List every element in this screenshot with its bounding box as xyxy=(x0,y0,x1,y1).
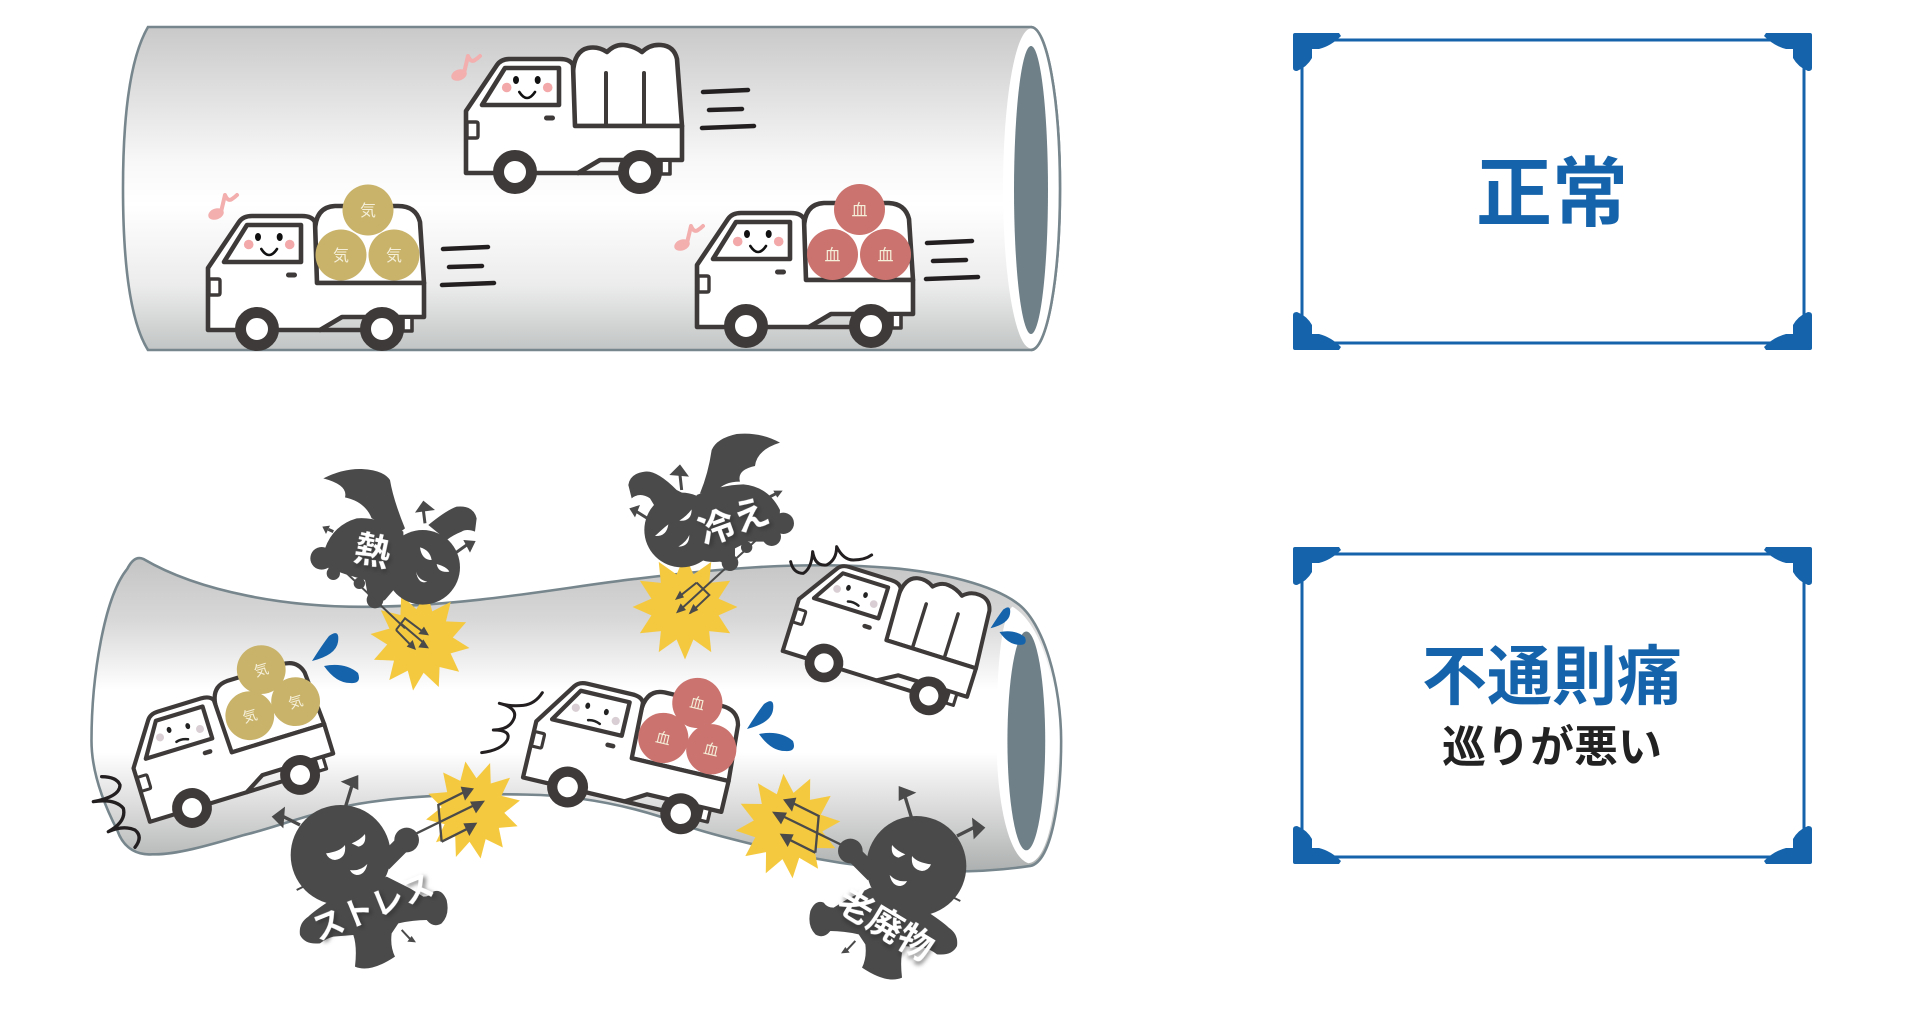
blood truck, struggling: 血 xyxy=(688,694,706,714)
qi truck, normal: 気 xyxy=(386,247,402,265)
devil: cold xyxy=(628,434,794,614)
healthy vessel tube xyxy=(123,27,1060,350)
blood truck, normal: 血 xyxy=(877,246,894,264)
blood truck, normal: 血 xyxy=(851,202,868,220)
blood truck, struggling: 血 xyxy=(702,740,720,760)
blood truck, struggling xyxy=(520,643,751,838)
empty covered truck (top) xyxy=(450,45,754,189)
blood truck, normal xyxy=(673,184,978,342)
qi truck, normal: 気 xyxy=(360,202,376,220)
devil: stress xyxy=(272,775,485,969)
panel: irregular flow: 巡りが悪い xyxy=(1442,723,1662,772)
devil: cold: 冷え xyxy=(693,490,775,553)
narrowed vessel tube xyxy=(91,558,1061,871)
devil: heat: 熱 xyxy=(351,527,394,575)
qi truck, struggling: 気 xyxy=(241,706,259,727)
qi truck, struggling: 気 xyxy=(286,692,305,713)
effort squiggle: rear of qi truck xyxy=(93,777,139,847)
qi truck, struggling xyxy=(110,632,344,835)
devil: heat xyxy=(310,469,477,650)
blood truck, struggling: 血 xyxy=(654,729,672,749)
panel: irregular flow xyxy=(1293,547,1812,864)
blood truck, normal: 血 xyxy=(824,246,841,264)
heat star burst xyxy=(364,585,476,697)
devil: waste xyxy=(772,786,985,980)
waste star burst xyxy=(731,769,845,883)
qi truck, normal xyxy=(207,184,494,346)
stress star burst xyxy=(411,747,535,873)
panel: irregular flow: 不通則痛 xyxy=(1422,640,1682,713)
devil: stress: ストレス xyxy=(307,866,439,947)
cold star burst xyxy=(632,554,738,660)
effort squiggle: above empty truck xyxy=(791,547,872,573)
effort squiggle: front of blood truck xyxy=(482,693,542,753)
sweat drops xyxy=(312,607,1026,751)
panel: normal xyxy=(1293,33,1812,350)
qi truck, normal: 気 xyxy=(333,247,349,265)
panel: normal: 正常 xyxy=(1476,152,1628,237)
qi truck, struggling: 気 xyxy=(252,660,271,681)
devil: waste: 老廃物 xyxy=(830,881,940,969)
empty truck, struggling xyxy=(779,544,997,721)
